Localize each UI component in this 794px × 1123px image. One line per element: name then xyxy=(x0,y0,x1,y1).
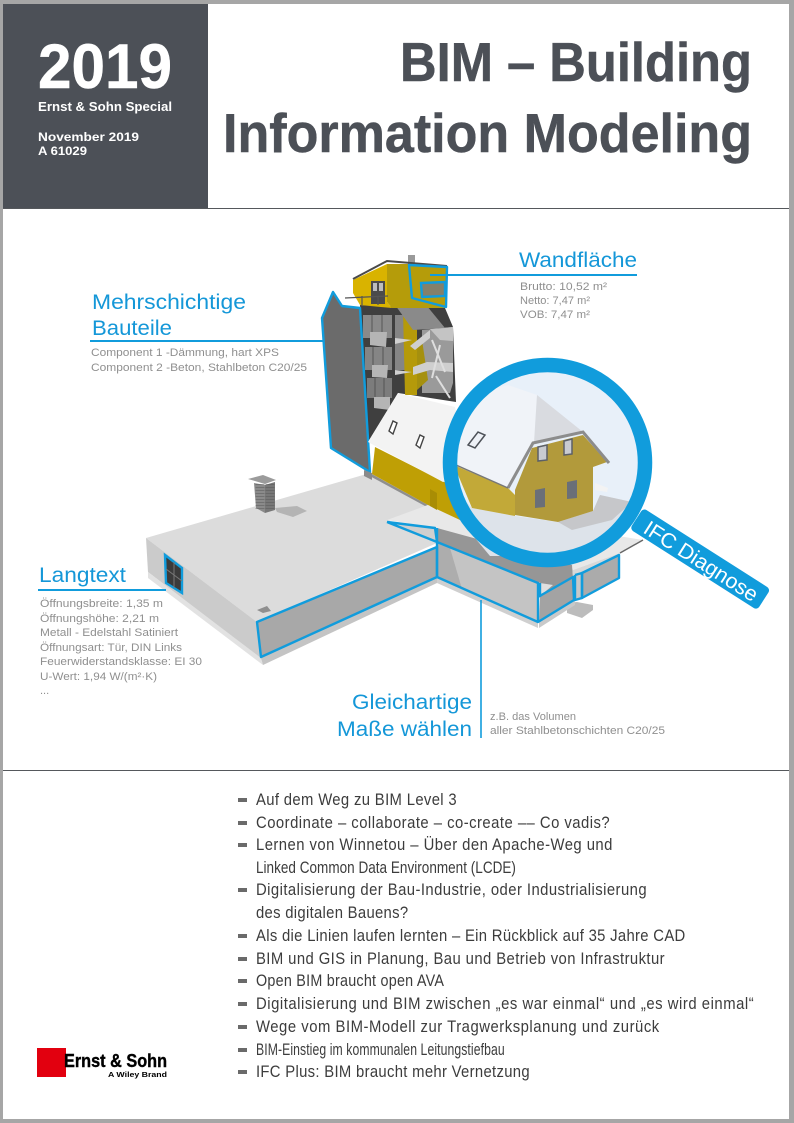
contents list: Wege vom BIM-Modell zur Tragwerksplanung und zurück xyxy=(256,1018,659,1036)
magnifier xyxy=(450,365,771,610)
illustration: BIM building model xyxy=(146,255,771,665)
callout: Wandfläche xyxy=(430,249,637,321)
contents list: Linked Common Data Environment (LCDE) xyxy=(256,859,516,877)
callout: Mehrschichtige Bauteile: Component 1 -Dämmung, hart XPS xyxy=(91,347,279,359)
callout: Gleichartige Maße wählen: Maße wählen xyxy=(337,718,472,741)
callout: Langtext: Öffnungsbreite: 1,35 m xyxy=(40,598,163,610)
gable wall highlight xyxy=(322,292,370,472)
article number: A 61029 xyxy=(38,144,87,158)
series name: Ernst & Sohn Special xyxy=(38,100,172,114)
contents list: Lernen von Winnetou – Über den Apache-Weg und xyxy=(256,835,612,854)
callout: Gleichartige Maße wählen: aller Stahlbetonschichten C20/25 xyxy=(490,725,665,737)
contents list: Als die Linien laufen lernten – Ein Rückblick auf 35 Jahre CAD xyxy=(256,927,685,945)
callout: Gleichartige Maße wählen: Gleichartige xyxy=(352,691,472,714)
callout: Langtext: Öffnungshöhe: 2,21 m xyxy=(40,613,159,625)
callout: Langtext: Öffnungsart: Tür, DIN Links xyxy=(40,642,183,654)
issue date: November 2019 xyxy=(38,130,139,144)
callout: Mehrschichtige Bauteile xyxy=(90,291,323,374)
callout: Mehrschichtige Bauteile: Bauteile xyxy=(92,317,172,340)
right wing of the base xyxy=(387,505,643,628)
gable wall base xyxy=(364,470,372,480)
handle label: IFC Diagnose xyxy=(639,517,762,607)
door xyxy=(165,555,182,593)
callout: Wandfläche: Netto: 7,47 m² xyxy=(520,295,590,307)
contents list: Open BIM braucht open AVA xyxy=(256,972,445,990)
callout: Wandfläche: Wandfläche xyxy=(519,249,637,272)
chimney on platform xyxy=(248,475,307,517)
title: Information Modeling xyxy=(223,102,752,164)
callout: Langtext: Metall - Edelstahl Satiniert xyxy=(40,627,178,639)
callout: Wandfläche: VOB: 7,47 m² xyxy=(520,309,590,321)
panel: issue info xyxy=(3,4,208,208)
callout: Langtext xyxy=(38,564,202,697)
logo: Ernst & Sohn xyxy=(37,1048,167,1079)
callout: Langtext: ... xyxy=(40,685,49,697)
logo: Ernst & Sohn: Ernst & Sohn xyxy=(64,1050,167,1071)
magnifier handle xyxy=(630,508,771,610)
contents list: Auf dem Weg zu BIM Level 3 xyxy=(256,791,457,809)
long house xyxy=(368,393,470,520)
base platform xyxy=(146,473,437,665)
callout: Mehrschichtige Bauteile: Mehrschichtige xyxy=(92,291,246,314)
contents list: des digitalen Bauens? xyxy=(256,904,408,922)
title: BIM – Building xyxy=(400,31,752,93)
contents list: BIM und GIS in Planung, Bau und Betrieb von Infrastruktur xyxy=(256,950,665,968)
roof vent xyxy=(257,606,271,613)
title xyxy=(223,31,752,164)
lens view xyxy=(456,372,638,556)
contents list: BIM-Einstieg im kommunalen Leitungstiefbau xyxy=(256,1041,505,1060)
callout: Langtext: Langtext xyxy=(39,564,126,587)
callout: Langtext: Feuerwiderstandsklasse: EI 30 xyxy=(40,656,202,668)
contents list: IFC Plus: BIM braucht mehr Vernetzung xyxy=(256,1063,530,1081)
callout: Langtext: U-Wert: 1,94 W/(m²·K) xyxy=(40,671,157,683)
wing highlight outlines xyxy=(387,522,619,622)
contents list: Digitalisierung und BIM zwischen „es war einmal“ und „es wird einmal“ xyxy=(256,995,754,1013)
callout: Wandfläche: Brutto: 10,52 m² xyxy=(520,281,607,293)
contents list: Digitalisierung der Bau-Industrie, oder Industrialisierung xyxy=(256,881,647,899)
year: 2019 xyxy=(38,32,172,102)
platform highlight outline xyxy=(257,547,437,657)
logo: Ernst & Sohn: A Wiley Brand xyxy=(108,1070,167,1079)
callout: Gleichartige Maße wählen xyxy=(337,600,665,741)
callout: Gleichartige Maße wählen: z.B. das Volumen xyxy=(490,711,576,723)
lens ring xyxy=(450,365,645,560)
contents list xyxy=(238,791,754,1081)
callout: Mehrschichtige Bauteile: Component 2 -Beton, Stahlbeton C20/25 xyxy=(91,362,307,374)
tower xyxy=(345,255,456,470)
contents list: Coordinate – collaborate – co-create –– Co vadis? xyxy=(256,814,610,832)
wall highlight xyxy=(409,265,447,307)
